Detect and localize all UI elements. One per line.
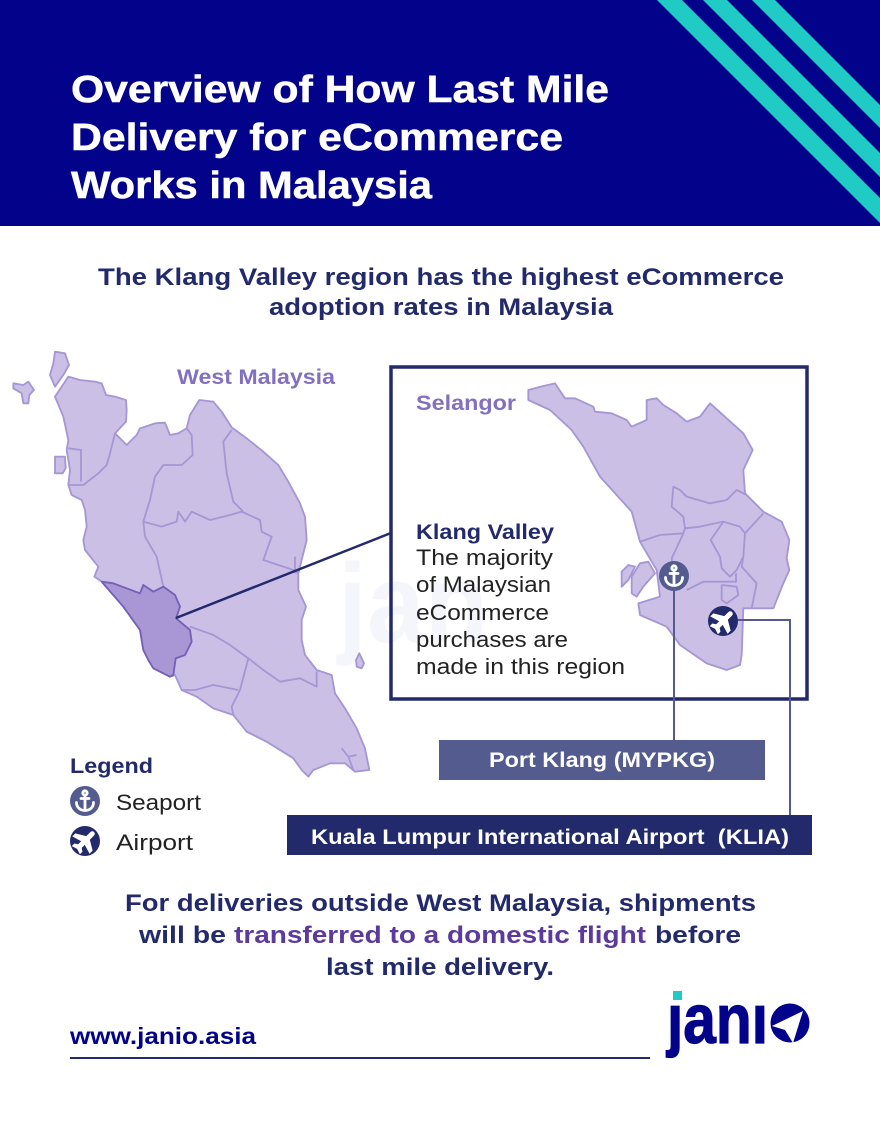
legend icon: seaport [70, 786, 100, 816]
legend label: airport: Airport [116, 830, 193, 855]
connector line [176, 533, 391, 618]
subtitle [98, 264, 784, 321]
island: north-west [13, 382, 34, 403]
closing statement: last mile delivery. [326, 954, 554, 981]
icon: seaport marker [659, 561, 689, 591]
closing statement: For deliveries outside West Malaysia, shipments [125, 890, 756, 917]
island: Tioman [356, 653, 364, 668]
legend: Legend [70, 755, 153, 778]
label bar: KLIA [287, 815, 812, 855]
leader line: seaport [673, 590, 675, 741]
highlighted region: Selangor [102, 582, 192, 677]
footer rule [70, 1057, 650, 1059]
peninsula outline [55, 377, 369, 777]
logo: janio: jani [665, 980, 768, 1058]
title [71, 69, 609, 207]
closing statement [125, 890, 756, 981]
map: West Malaysia [13, 352, 369, 777]
map: Selangor [528, 383, 789, 670]
title: Delivery for eCommerce [71, 117, 563, 159]
closing statement: transferred to a domestic flight [234, 922, 646, 949]
subtitle: The Klang Valley region has the highest eCommerce [98, 264, 784, 291]
title: Overview of How Last Mile [71, 69, 609, 111]
text: Klang Valley description: made in this region [416, 654, 625, 679]
leader line: airport [738, 620, 790, 815]
label bar: Port Klang: Port Klang (MYPKG) [489, 749, 715, 772]
label: West Malaysia: West Malaysia [177, 366, 335, 389]
text: Klang Valley description: Klang Valley [416, 521, 554, 544]
island: Langkawi [50, 352, 69, 387]
legend icon: airport [67, 823, 103, 859]
state borders [68, 428, 357, 770]
website url: www.janio.asia [69, 1023, 256, 1049]
text: Klang Valley description: The majority [416, 545, 553, 570]
text: Klang Valley description: eCommerce [416, 600, 549, 625]
text: Klang Valley description: of Malaysian [416, 572, 551, 597]
closing statement: will be [138, 922, 226, 949]
text: Klang Valley description: purchases are [416, 627, 568, 652]
title: Works in Malaysia [71, 165, 433, 207]
label bar: KLIA: Kuala Lumpur International Airport (KLIA) [311, 826, 789, 849]
header banner [0, 0, 880, 226]
legend [67, 755, 201, 859]
legend label: seaport: Seaport [116, 790, 201, 815]
island: Penang [55, 457, 66, 473]
panel: Selangor inset [391, 367, 807, 699]
closing statement: before [655, 922, 741, 949]
subtitle: adoption rates in Malaysia [269, 294, 613, 321]
label bar: Port Klang [439, 740, 765, 780]
text: Klang Valley description [416, 521, 625, 679]
icon: airport marker [705, 603, 741, 639]
label: Selangor: Selangor [416, 392, 516, 415]
watermark: jan [336, 541, 488, 666]
